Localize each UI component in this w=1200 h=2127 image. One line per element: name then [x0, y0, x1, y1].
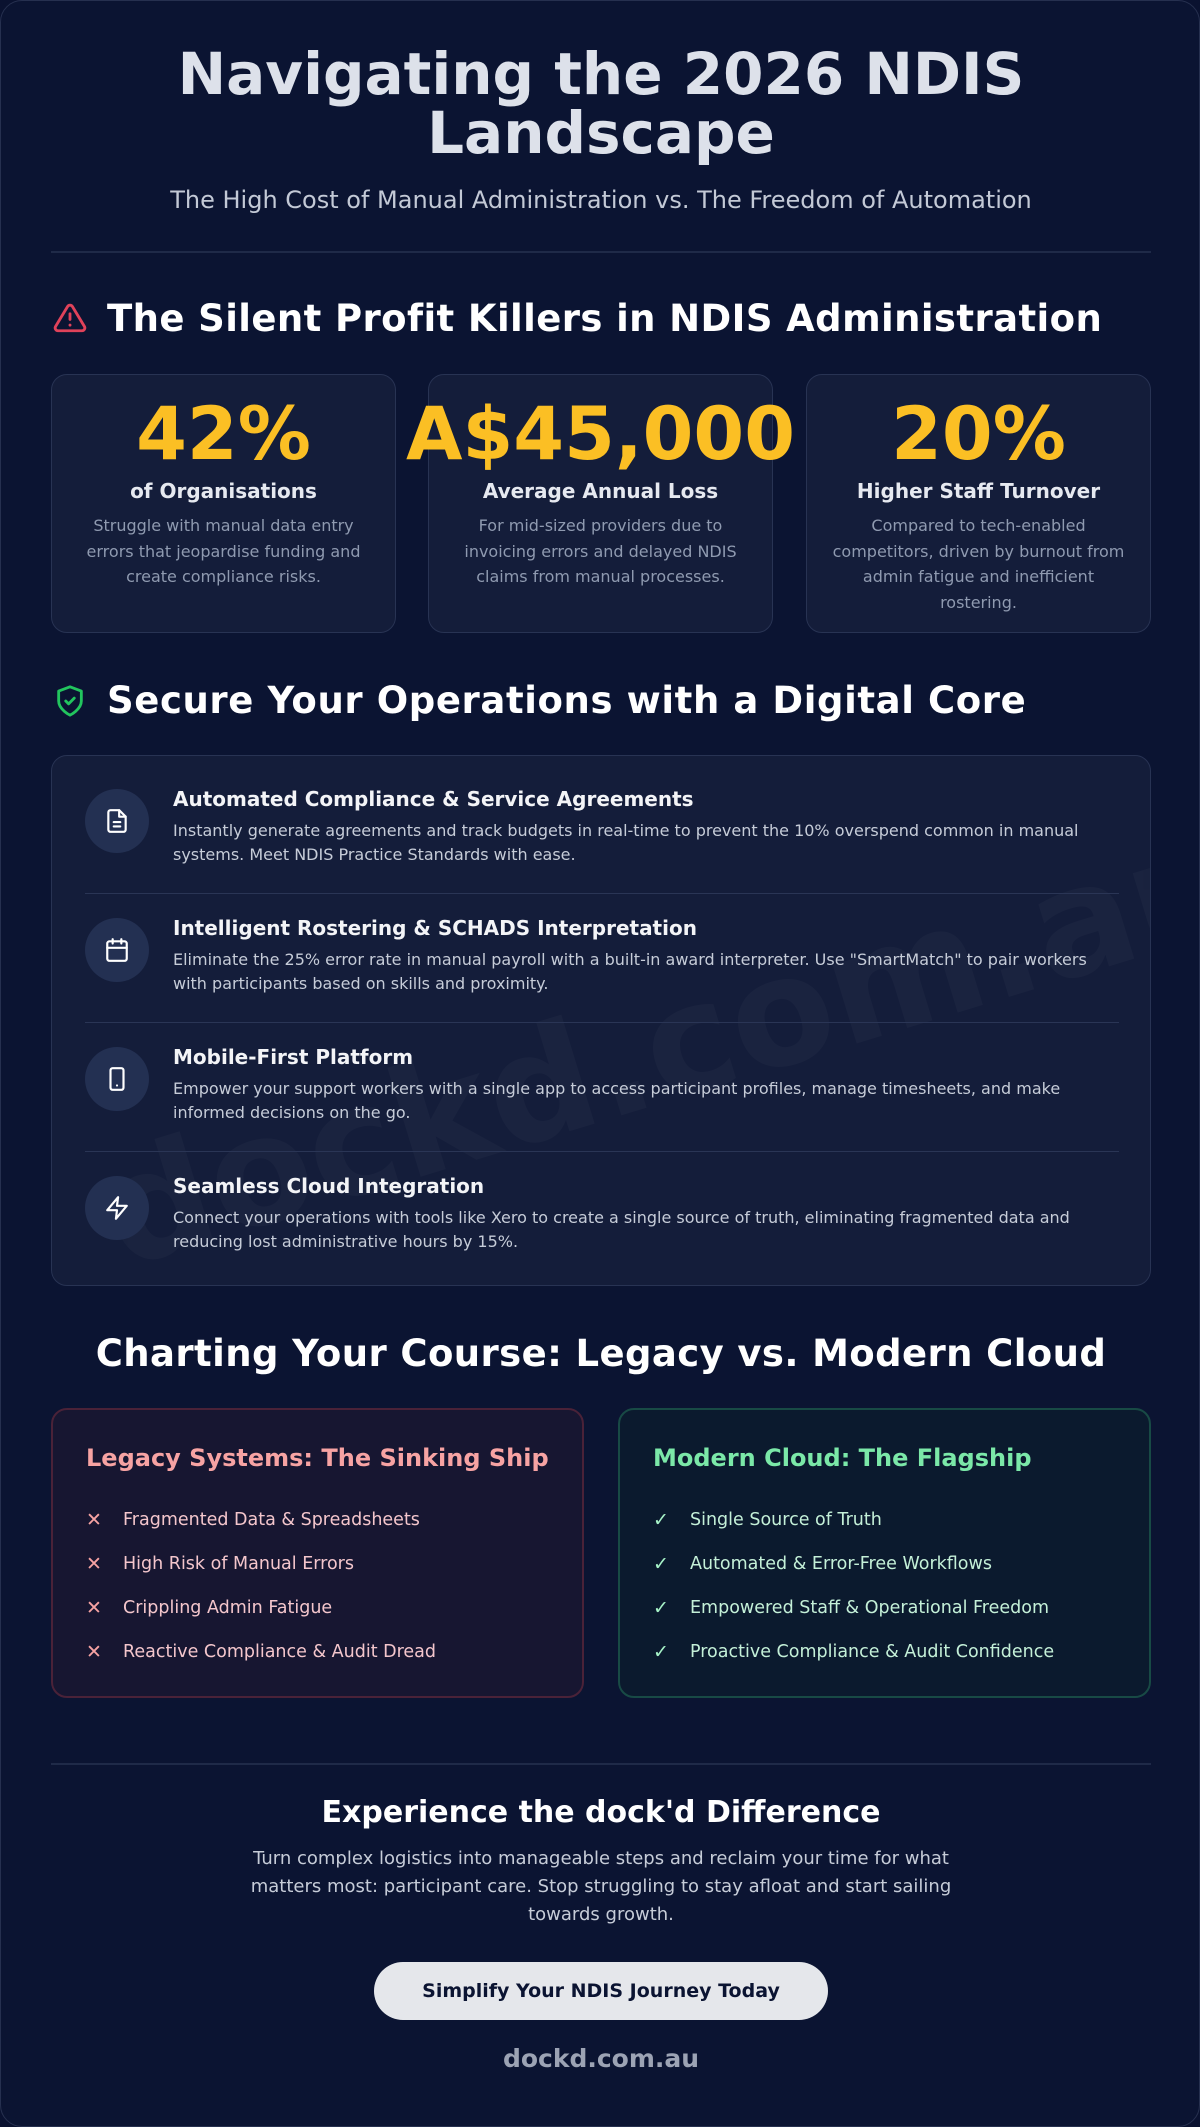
- panel: modern: Empowered Staff & Operational Freedom: [690, 1598, 1049, 1618]
- panel: legacy: ✕: [86, 1509, 102, 1531]
- feature 1: [85, 787, 1078, 864]
- stat card 3: 20%: [891, 392, 1066, 477]
- feature 4: Connect your operations with tools like Xero to create a single source of truth, eliminating fragmented data and reducing lost administrative hours by 15%.: [173, 1208, 1070, 1251]
- feature 1: Automated Compliance & Service Agreements: [173, 787, 694, 811]
- panel: modern: ✓: [653, 1597, 669, 1619]
- panel: modern: Automated & Error-Free Workflows: [690, 1554, 992, 1574]
- feature 3: Mobile-First Platform: [173, 1045, 413, 1069]
- feature 4: Seamless Cloud Integration: [173, 1174, 484, 1198]
- section heading: profit killers: The Silent Profit Killers in NDIS Administration: [107, 297, 1102, 340]
- stat card 2: Average Annual Loss: [483, 479, 718, 503]
- panel: legacy: Legacy Systems: The Sinking Ship: [86, 1444, 549, 1472]
- stat card 1: Struggle with manual data entry errors that jeopardise funding and create compliance risks.: [87, 516, 360, 586]
- stat card 3: Compared to tech-enabled competitors, driven by burnout from admin fatigue and inefficient rostering.: [833, 516, 1124, 612]
- title: Landscape: [427, 99, 775, 167]
- panel: legacy: ✕: [86, 1597, 102, 1619]
- stat card 1: 42%: [136, 392, 311, 477]
- panel: legacy: [51, 1408, 584, 1698]
- icon: warning triangle: [54, 304, 86, 332]
- panel: modern: [618, 1408, 1151, 1698]
- panel: modern: Modern Cloud: The Flagship: [653, 1444, 1032, 1472]
- panel: modern: ✓: [653, 1641, 669, 1663]
- feature 2: [85, 916, 1087, 993]
- stat card 3: [806, 374, 1151, 633]
- panel: modern: ✓: [653, 1553, 669, 1575]
- section heading: digital core: Secure Your Operations with a Digital Core: [107, 679, 1026, 722]
- stat card 3: Higher Staff Turnover: [857, 479, 1100, 503]
- panel: legacy: Crippling Admin Fatigue: [123, 1598, 332, 1618]
- CTA button: Simplify Your NDIS Journey Today: [422, 1980, 780, 2002]
- stat card 2: [428, 374, 773, 633]
- feature 1: Instantly generate agreements and track budgets in real-time to prevent the 10% overspend common in manual systems. Meet NDIS Practice Standards with ease.: [173, 821, 1078, 864]
- stat card 2: For mid-sized providers due to invoicing errors and delayed NDIS claims from manual processes.: [464, 516, 737, 586]
- CTA text: Turn complex logistics into manageable steps and reclaim your time for what matters most: participant care. Stop struggling to stay afloat and start sailing towards growth.: [251, 1848, 951, 1925]
- section heading: comparison: Charting Your Course: Legacy vs. Modern Cloud: [96, 1332, 1106, 1375]
- panel: modern: ✓: [653, 1509, 669, 1531]
- panel: modern: Single Source of Truth: [690, 1510, 882, 1530]
- panel: legacy: ✕: [86, 1641, 102, 1663]
- feature 2: Intelligent Rostering & SCHADS Interpretation: [173, 916, 697, 940]
- panel: legacy: Fragmented Data & Spreadsheets: [123, 1510, 420, 1530]
- CTA button: [374, 1962, 828, 2020]
- title: Navigating the 2026 NDIS: [178, 40, 1024, 108]
- stat card 1: [51, 374, 396, 633]
- feature 4: [85, 1174, 1070, 1251]
- panel: legacy: Reactive Compliance & Audit Dread: [123, 1642, 436, 1662]
- title: [178, 40, 1024, 167]
- feature 3: Empower your support workers with a single app to access participant profiles, manage timesheets, and make informed decisions on the go.: [173, 1079, 1060, 1122]
- footer url: dockd.com.au: [503, 2044, 699, 2073]
- panel: legacy: ✕: [86, 1553, 102, 1575]
- panel: legacy: High Risk of Manual Errors: [123, 1554, 354, 1574]
- feature 2: Eliminate the 25% error rate in manual payroll with a built-in award interpreter. Use "SmartMatch" to pair workers with participants based on skills and proximity.: [173, 950, 1087, 993]
- stat card 2: A$45,000: [406, 392, 795, 477]
- stat card 1: of Organisations: [130, 479, 317, 503]
- subtitle: The High Cost of Manual Administration vs. The Freedom of Automation: [170, 186, 1032, 214]
- feature 3: [85, 1045, 1060, 1122]
- panel: modern: Proactive Compliance & Audit Confidence: [690, 1642, 1054, 1662]
- CTA heading: Experience the dock'd Difference: [322, 1795, 880, 1830]
- icon: shield: [57, 685, 83, 717]
